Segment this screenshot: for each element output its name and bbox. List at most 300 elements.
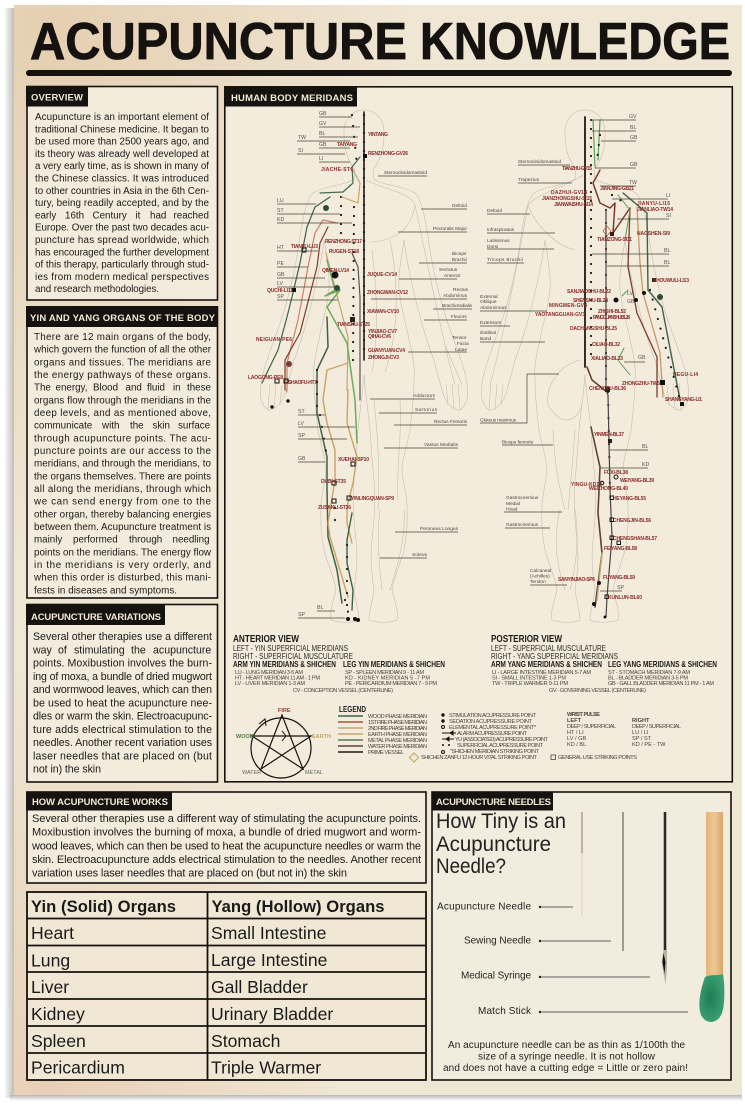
posterior meridian labels (535, 114, 702, 601)
wrist pulse table: DEEP / SUPERFICIAL (567, 724, 616, 730)
anterior muscle labels: Biceps (452, 251, 467, 257)
heading: acupuncture variations (26, 604, 165, 625)
anterior meridian labels: LAOGONG-PE8 (248, 375, 283, 381)
anterior view key: CV - CONCEPTION VESSEL (CENTERLINE) (293, 688, 393, 694)
text: variations body: stimulating (74, 644, 125, 656)
anterior meridian labels: GB (319, 111, 327, 117)
text: variations body: Several other therapies use a different (33, 631, 212, 643)
text: yin and yang body: puncture points are our access to the (34, 446, 212, 457)
heading: acupuncture needles: ACUPUNCTURE NEEDLES (436, 797, 551, 808)
posterior meridian labels: CHENGSHAN-BL57 (613, 536, 657, 542)
anterior meridian labels: LV (298, 421, 304, 427)
anterior meridian labels: TW (298, 135, 306, 141)
anterior muscle labels: Rectus (453, 287, 469, 293)
posterior meridian labels: SI (666, 213, 671, 219)
needle labels: Acupuncture Needle (437, 902, 531, 912)
anterior meridian labels: YINTANG (368, 132, 388, 138)
heading: how tiny: Acupuncture (436, 833, 551, 856)
anterior meridian labels: ZHONGJI-CV3 (368, 355, 399, 361)
posterior view key: ST - STOMACH MERIDIAN 7-9 AM (608, 670, 690, 676)
anterior muscle labels: Anterior (444, 273, 461, 279)
text: yin and yang body: in (173, 383, 181, 394)
text: yin and yang body: Blood (93, 383, 118, 394)
anterior view key: LEFT - YIN SUPERFICIAL MERIDIANS (233, 644, 348, 653)
heading: how tiny: How Tiny is an (436, 810, 566, 833)
text: variations body: the (131, 644, 146, 656)
posterior muscle labels: Extensors (480, 320, 502, 326)
posterior meridian labels: JIANLIAO-TW14 (637, 207, 673, 213)
posterior muscle labels: Biceps femoris (502, 440, 534, 446)
posterior meridian labels: GB (630, 135, 638, 141)
text: variations body: ture adds electrical stimulation to the (33, 724, 212, 736)
text: variations body: of (58, 644, 67, 656)
text: overview body: Acupuncture is an important element of (35, 112, 209, 123)
anterior meridian labels: GUANYUAN-CV4 (368, 348, 405, 354)
anterior muscle labels: Vastus Medialis (424, 442, 459, 448)
icon: acupuncture needle (581, 812, 583, 915)
posterior meridian labels: BL (664, 260, 670, 266)
anterior meridian labels: JIACHE-ST6 (321, 167, 353, 173)
legend: 2ND FIRE PHASE MERIDIAN (368, 726, 427, 732)
anterior muscle labels: Pectoralis Major (433, 226, 467, 232)
anterior muscle labels: Brachii (452, 257, 467, 263)
text: variations body: ing of moxa, a bundle of dried mugwort (33, 671, 212, 683)
wrist pulse table: HT / LI (567, 730, 584, 736)
legend: "SHICHEN MERIDIAN STRIKING POINT (450, 749, 540, 755)
posterior meridian labels: DAZHUI-GV14 (551, 190, 587, 196)
anterior meridian labels: LV (277, 281, 283, 287)
posterior muscle labels: Medial (506, 501, 520, 507)
posterior meridian labels: CHENGJIN-BL56 (613, 518, 651, 524)
heading: yin and yang organs: YIN AND YANG ORGANS OF THE BODY (30, 313, 216, 324)
text: variations body (32, 631, 212, 776)
posterior muscle labels: Sternocleidomastoid (518, 159, 561, 165)
wrist pulse table: LV / GB (567, 736, 586, 742)
anterior muscle labels (370, 170, 473, 558)
text: how it works body: Moxibustion involves the burning of moxa, a bundle of dried mugwort and worm- (32, 827, 421, 839)
posterior meridian labels: HEGU-LI4 (673, 372, 698, 378)
heading: acupuncture variations: ACUPUNCTURE VARIATIONS (31, 612, 161, 623)
anterior meridian labels: RUGEN-ST18 (329, 249, 359, 255)
posterior view key: LEG YANG MERIDIANS & SHICHEN (608, 659, 717, 669)
text: overview body: puncture has spread worldwide, which (35, 235, 209, 246)
text: overview body (35, 112, 210, 295)
anterior meridian labels: GB (277, 272, 285, 278)
legend: LEGEND (339, 704, 366, 714)
posterior muscle labels: External (480, 294, 498, 300)
anterior meridian labels: GB (319, 142, 327, 148)
text: overview body: traditional Chinese medicine. It began to (35, 124, 210, 135)
legend: EARTH PHASE MERIDIAN (368, 732, 427, 738)
anterior meridian labels: GV (319, 121, 327, 127)
anterior meridian labels: TAIYANG (337, 142, 357, 148)
posterior view key: TW - TRIPLE WARMER 9-11 PM (492, 681, 568, 687)
posterior meridian labels: BL (664, 248, 670, 254)
anterior meridian labels: SI (298, 148, 303, 154)
heading: how acupuncture works: HOW ACUPUNCTURE WORKS (32, 797, 168, 808)
text: how it works body: variation uses laser needles that are placed on (but not in) the skin (32, 868, 347, 880)
text: overview body: had (150, 210, 166, 221)
posterior muscle labels (480, 159, 572, 585)
posterior view key: POSTERIOR VIEW (491, 634, 562, 645)
posterior muscle labels: Latissimus (487, 238, 510, 244)
text: yin and yang body: through (129, 535, 162, 546)
text: how it works body: wood leaves, which can then be used to heat the acupuncture needles or warm the (31, 840, 421, 852)
text: yin and yang body: points on the meridians. The energy flow (34, 547, 212, 558)
heading: acupuncture needles (432, 792, 553, 810)
heading: how tiny (436, 810, 566, 878)
posterior meridian labels: BL (642, 444, 648, 450)
text: yin and yang body: communicate (34, 421, 93, 432)
panel: how acupuncture works (26, 792, 426, 883)
table rows: Kidney (31, 1004, 85, 1024)
text: variations body: dles or warm the skin. Electroacupunc- (33, 711, 212, 723)
text: yin and yang body: fluid (147, 383, 165, 394)
anterior muscle labels: Deltoid (452, 203, 467, 209)
needle labels: Medical Syringe (461, 970, 531, 982)
text: needle note: and does not have a cutting edge = Little or zero pain! (443, 1063, 688, 1074)
text: variations body: laser needles that are placed on (but (33, 750, 212, 762)
anterior meridian labels: SP (298, 612, 305, 618)
posterior meridian labels: FEIYANG-BL58 (604, 546, 637, 552)
text: needle note (443, 1040, 688, 1074)
wrist pulse table (567, 712, 681, 748)
text: variations body: needles. Another recent variation uses (33, 737, 212, 749)
text: yin and yang body: which govern the function of all the other (33, 345, 212, 356)
five element pentagram (236, 708, 331, 778)
posterior view key: ARM YANG MERIDIANS & SHICHEN (491, 659, 602, 669)
heading: how acupuncture works (26, 792, 172, 810)
text: how it works body: skin. Electroacupuncture adds electrical stimulation to the needles. Another recent (32, 854, 421, 866)
posterior meridian labels: PANGGUANSHU-BL28 (593, 315, 630, 321)
text: yin and yang body: the energy pathways of these organs. (34, 370, 211, 381)
text: how it works body: Several other therapies use a different way of stimulating the acupuncture points. (32, 813, 421, 825)
posterior meridian labels: YINGU-KD10 (571, 482, 602, 488)
posterior meridian labels: WEIZHONG-BL40 (589, 486, 628, 492)
posterior muscle labels: Gastrocnemius (506, 495, 539, 501)
anterior meridian labels: ZHONGWAN-CV12 (367, 290, 408, 296)
table rows: Small Intestine (211, 923, 326, 943)
posterior muscle labels: Band (480, 336, 492, 342)
table rows: Heart (31, 923, 74, 943)
posterior meridian labels: NAOSHEN-SI9 (637, 231, 670, 237)
text: yin and yang body: fests in diseases and symptoms. (34, 585, 177, 596)
anterior meridian labels: QIMEN-LV14 (322, 268, 349, 274)
anterior meridian labels: JUQUE-CV14 (367, 272, 397, 278)
posterior meridian labels: SP (617, 585, 624, 591)
anterior meridian labels: YINLINGQUAN-SP9 (351, 496, 394, 502)
heading: yin and yang organs (26, 306, 218, 327)
needle labels: Match Stick (478, 1006, 532, 1017)
legend: SUPERFICIAL ACUPRESSURE POINT (457, 743, 544, 749)
table rows: Large Intestine (211, 950, 327, 970)
text: yin and yang body: deep levels, and as mentioned above, (34, 408, 211, 419)
text: overview body: to other countries in Asia in the 6th Cen- (35, 186, 209, 197)
text: variations body: points. Moxibustion involves the burn- (33, 658, 212, 670)
posterior muscle labels: Oblique (480, 299, 497, 305)
text: overview body: its theory was already well developed at (35, 149, 209, 160)
posterior meridian labels: FUYANG-BL59 (603, 575, 635, 581)
anterior meridian labels: SP (298, 433, 305, 439)
text: yin and yang body: these (187, 383, 212, 394)
text: variations body: not in) the skin (33, 764, 101, 776)
anterior view key: ANTERIOR VIEW (233, 634, 299, 645)
posterior meridian labels: HEYANG-BL55 (613, 496, 646, 502)
anterior meridian labels: TIANSHU-ST25 (337, 322, 370, 328)
anterior view key: ARM YIN MERIDIANS & SHICHEN (233, 659, 336, 669)
posterior meridian labels: GV (629, 114, 637, 120)
anterior meridian labels: SHAOFU-HT7 (288, 380, 317, 386)
posterior view key: GB - GALL BLADDER MERIDIAN 11 PM - 1 AM (608, 681, 714, 687)
title (26, 13, 732, 76)
anterior meridian labels: QIHAI-CV6 (368, 334, 391, 340)
anterior meridian labels: ST (277, 208, 284, 214)
posterior muscle labels: Iliotibial (480, 330, 496, 336)
anterior meridian labels: TIANFU-LU3 (291, 244, 318, 250)
heading: overview (26, 86, 88, 106)
legend: WOOD PHASE MERIDIAN (368, 714, 427, 720)
legend: SHICHEN ZANFU 12 HOUR VITAL STRIKING POINT (421, 755, 538, 761)
table rows (31, 923, 333, 1078)
text: overview body: has encouraged the further development (35, 247, 209, 258)
anterior meridian labels: QUCHI-LI11 (267, 288, 293, 294)
text: yin and yang body: organs and tissues. The meridians are (34, 357, 212, 368)
posterior view key: LEFT - SUPERFICIAL MUSCULATURE (491, 644, 606, 653)
text: variations body: acupuncture (153, 644, 211, 656)
anterior view key: LV - LIVER MERIDIAN 1-3 AM (235, 681, 305, 687)
anterior muscle labels: Flexors (451, 314, 467, 320)
text: yin and yang body: surface (178, 421, 211, 432)
posterior meridian labels: JIANZHONGSHU-SI15 (542, 196, 592, 202)
posterior meridian labels: TIANZONG-SI11 (597, 237, 632, 243)
table rows: Gall Bladder (211, 977, 308, 997)
anterior meridian labels: GB (298, 456, 306, 462)
table rows: Stomach (211, 1031, 280, 1051)
posterior meridian labels: LI (666, 193, 670, 199)
legend: 1ST FIRE PHASE MERIDIAN (368, 720, 427, 726)
text: overview body: be used more than 2500 years ago, and (35, 137, 209, 148)
anterior meridian labels: YINJIAO-CV7 (368, 329, 397, 335)
posterior meridian labels: SHENSHU-BL23 (573, 298, 608, 304)
posterior meridian labels: BL (630, 125, 636, 131)
posterior meridian labels: MINGMEN-GV4 (549, 303, 587, 309)
panel: yin and yang organs (26, 306, 218, 598)
text: yin and yang body: The (34, 383, 51, 394)
posterior view key: RIGHT - YANG SUPERFICIAL MERIDIANS (491, 652, 618, 661)
anterior muscle labels: Rectus Femoris (434, 419, 468, 425)
anterior view key: HT - HEART MERIDIAN 11 AM - 1 PM (235, 676, 320, 682)
posterior muscle labels: (Achilles) (530, 574, 550, 580)
text: overview body: ies from modern medical perspectives (35, 272, 209, 283)
legend: ALARM ACUPRESSURE POINT (457, 731, 528, 737)
posterior meridian labels: WEIYANG-BL39 (620, 478, 654, 484)
five element pentagram: WATER (242, 770, 261, 776)
table: yin and yang organs (27, 892, 426, 1080)
posterior meridian labels: FUXI-BL38 (604, 470, 628, 476)
anterior meridian labels: BL (317, 605, 323, 611)
posterior view key: BL - BLADDER MERIDIAN 3-5 PM (608, 676, 688, 682)
anterior meridian labels: KD (277, 217, 284, 223)
anterior view key (233, 634, 445, 694)
text: overview body: of this therapy, particularly through stud- (35, 260, 209, 271)
icon: match stick (699, 812, 724, 1022)
text: yin and yang body: in the meridians is very orderly, and (34, 560, 211, 571)
anterior meridian labels: DUBI-ST35 (321, 479, 346, 485)
wrist pulse table: SP / ST (632, 736, 652, 742)
posterior meridian labels: LV (627, 291, 633, 297)
anterior muscle labels: Tensor (452, 335, 467, 341)
text: overview body: and research methodologies. (35, 284, 159, 295)
posterior muscle labels: Infraspinatus (487, 227, 515, 233)
posterior body figure (481, 110, 689, 622)
text: yin and yang body: There are 12 main organs of the body, (34, 332, 211, 343)
anterior muscle labels: Sternocleidomastoid (384, 170, 427, 176)
posterior meridian labels: ZHISHI-BL52 (598, 309, 626, 315)
text: overview body: reached (174, 210, 209, 221)
icon: medical syringe (662, 812, 667, 984)
text: variations body: way (32, 644, 53, 656)
anterior meridian labels: HT (277, 245, 285, 251)
anterior meridian labels: XIAWAN-CV10 (367, 309, 399, 315)
text: how it works body (31, 813, 421, 880)
anterior view key: KD - KIDNEY MERIDIAN 5 -7 PM (345, 676, 430, 682)
posterior view key (491, 634, 717, 694)
text: overview body: the Chinese classics. It was introduced (35, 174, 209, 184)
posterior meridian labels: GB (627, 299, 635, 305)
text: overview body: early (35, 210, 56, 221)
text: overview body: a very early time, as is shown in many of (35, 161, 209, 172)
posterior muscle labels: Dorsi (487, 244, 498, 250)
anterior meridian labels: RENZHONG-GV26 (368, 151, 408, 157)
text: yin and yang body: all along the meridians, through which (34, 484, 211, 495)
table rows: Lung (31, 950, 70, 970)
anterior meridian labels: LU (277, 198, 284, 204)
text: yin and yang body: when this order is disturbed, this mani- (33, 573, 211, 584)
wrist pulse table: LU / LI (632, 730, 649, 736)
table rows: Liver (31, 977, 69, 997)
anterior meridian lines (262, 112, 367, 622)
anterior view key: LU - LUNG MERIDIAN 3-5 AM (235, 670, 303, 676)
anterior muscle labels: Soleus (412, 552, 428, 558)
wrist pulse table: WRIST PULSE (567, 712, 600, 718)
posterior meridian labels: YINMEN-BL37 (594, 432, 624, 438)
anterior muscle labels: Adductors (413, 393, 436, 399)
panel: acupuncture variations (26, 604, 218, 782)
text: yin and yang body: other organ, thereby balancing energies (34, 509, 211, 520)
posterior meridian labels: SHOUWULI-LI13 (653, 278, 689, 284)
anterior view key: RIGHT - SUPERFICIAL MUSCULATURE (233, 652, 353, 661)
text: overview body: Europe. Over the past two decades acu- (35, 223, 209, 234)
table rows: Urinary Bladder (211, 1004, 333, 1024)
heading: human body meridians: HUMAN BODY MERIDANS (231, 93, 353, 104)
table header: Yang (Hollow) Organs (212, 897, 384, 916)
posterior muscle labels: Calcaneal (530, 568, 551, 574)
legend: PRIME VESSEL (368, 750, 404, 756)
posterior muscle labels: Abdominous (480, 305, 507, 311)
text: yin and yang body: energy, (56, 383, 87, 394)
posterior meridian labels: SANJIAOSHU-BL22 (567, 289, 611, 295)
anterior muscle labels: Facia (457, 341, 469, 347)
anterior meridian labels: SP (277, 294, 284, 300)
text: yin and yang body: through acupuncture points. The acu- (34, 433, 211, 444)
text: yin and yang body: performed (73, 535, 118, 546)
icon: sewing needle (622, 812, 624, 951)
posterior meridian labels: GB (638, 355, 646, 361)
posterior meridian lines (585, 117, 684, 618)
five element pentagram: EARTH (312, 734, 331, 740)
text: overview body: Century (92, 210, 127, 221)
legend: SEDATION ACUPRESSURE POINT (449, 719, 533, 725)
table header (31, 897, 384, 916)
text: yin and yang body: between them. Acupuncture treatment is (34, 522, 211, 533)
text: variations body: be used to heat the acupuncture nee- (33, 697, 212, 709)
posterior meridian labels: JIANWAISHU-SI14 (554, 202, 593, 208)
table rows: Pericardium (31, 1058, 125, 1078)
table rows: Spleen (31, 1031, 86, 1051)
text: yin and yang body: the (130, 421, 144, 432)
anterior meridian labels: ZUSANLI-ST36 (318, 505, 351, 511)
posterior muscle labels: Tendon (530, 579, 546, 585)
posterior meridian labels: XIALIAO-BL33 (591, 356, 623, 362)
posterior muscle labels: Gastrocnemius (506, 522, 539, 528)
posterior meridian labels: TW (629, 180, 637, 186)
heading: overview: OVERVIEW (31, 92, 83, 104)
posterior meridian labels: SHANGYANG-LI1 (665, 397, 702, 403)
heading: human body meridians (224, 86, 357, 106)
posterior meridian labels: ZHONGZHU-TW5 (622, 381, 660, 387)
posterior meridian labels: CILIAO-BL32 (592, 342, 620, 348)
posterior view key: LI - LARGE INTESTINE MERIDIAN 5-7 AM (492, 670, 591, 676)
legend: ELEMENTAL ACUPRESSURE POINT* (449, 725, 537, 731)
text: yin and yang body: mainly (34, 535, 62, 546)
panel: human body meridians (224, 86, 732, 782)
anterior muscle labels: Latae (455, 347, 467, 353)
text: yin and yang body: with (101, 421, 119, 432)
anterior muscle labels: Serratus (439, 267, 458, 273)
anterior meridian labels (248, 111, 408, 618)
anterior view key: LEG YIN MERIDIANS & SHICHEN (343, 659, 445, 669)
legend: YU (ASSOCIATED) ACUPRESSURE POINT (455, 737, 549, 743)
needle labels: Sewing Needle (464, 936, 531, 946)
text: yin and yang body: and (126, 383, 142, 394)
anterior muscle labels: Peroneus Longus (420, 526, 459, 532)
anterior meridian labels: BL (319, 131, 325, 137)
anterior meridian labels: ST (298, 409, 305, 415)
text: overview body: tury, being readily accepted, and by the (35, 198, 210, 209)
panel: overview (26, 86, 218, 300)
text: overview body: it (136, 210, 141, 221)
text: needle note: An acupuncture needle can be as thin as 1/100th the (448, 1040, 685, 1051)
posterior meridian labels: DACHANGSHU-BL25 (570, 326, 617, 332)
legend: WATER PHASE MERIDIAN (368, 744, 427, 750)
wrist pulse table: LEFT (567, 718, 582, 724)
posterior meridian labels: YAOTANGGUAN-GV3 (535, 312, 585, 318)
anterior view key: PE - PERICARDIUM MERIDIAN 7 - 9 PM (345, 681, 437, 687)
posterior view key: GV - GOVERNING VESSEL (CENTERLINE) (549, 688, 646, 694)
posterior meridian labels: TIANZHU-GV15 (562, 166, 592, 172)
anterior meridian labels: NEIGUAN-PE6 (256, 337, 292, 343)
text: needle note: size of a syringe needle. It is not hollow (478, 1052, 656, 1062)
wrist pulse table: KD / BL (567, 742, 586, 748)
posterior view key: SI - SMALL INTESTINE 1-3 PM (492, 676, 566, 682)
posterior meridian labels: GB (630, 162, 638, 168)
five element pentagram: METAL (305, 770, 323, 776)
posterior muscle labels: Head (506, 506, 518, 512)
anterior meridian labels: LI (319, 156, 323, 162)
posterior meridian labels: SANYINJIAO-SP6 (558, 577, 595, 583)
title: ACUPUNCTURE (30, 13, 407, 71)
legend: METAL PHASE MERIDIAN (368, 738, 427, 744)
